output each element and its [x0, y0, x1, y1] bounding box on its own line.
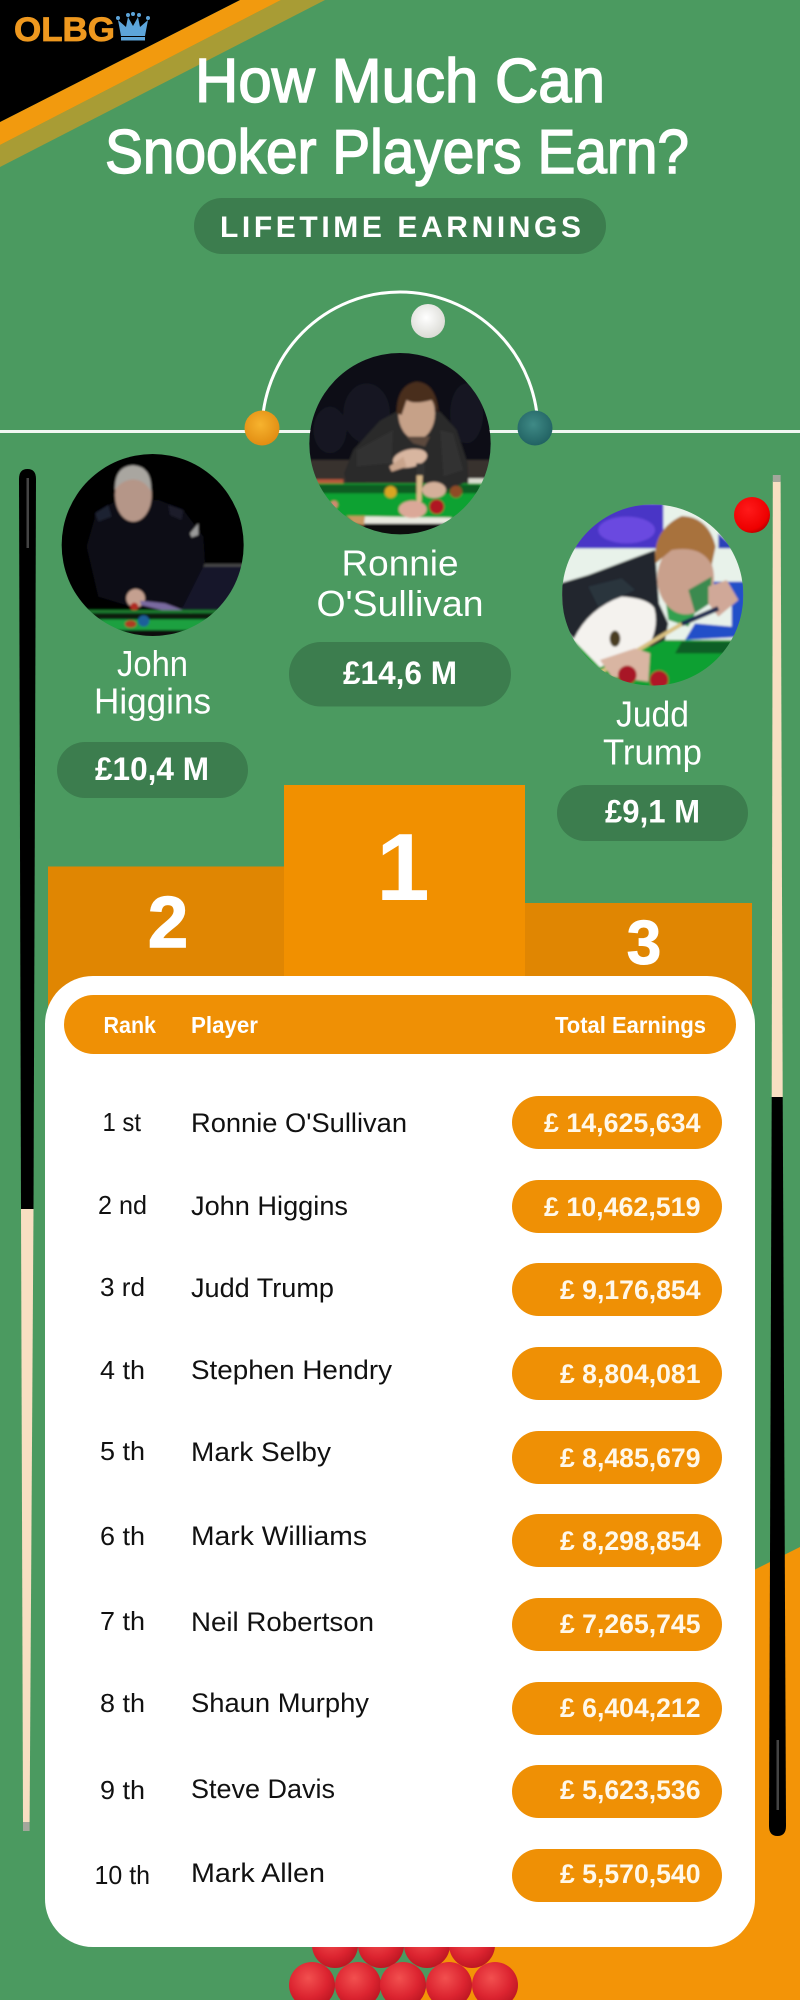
row 10: £ 5,570,540: [560, 1859, 700, 1889]
row 10: Mark Allen: [191, 1858, 325, 1888]
table header: Player: [191, 1012, 258, 1038]
row 4: 4 th: [100, 1355, 145, 1385]
ball: red beside Judd Trump: [734, 497, 770, 533]
subtitle pill: lifetime earnings: [194, 198, 606, 254]
podium: second place: 2: [148, 883, 188, 963]
card: Judd Trump name and earnings: [557, 694, 748, 841]
row 1: Ronnie O'Sullivan: [191, 1108, 407, 1138]
row 8: [100, 1682, 722, 1735]
row 8: £ 6,404,212: [560, 1693, 700, 1723]
row 7: [100, 1598, 722, 1651]
row 3: £ 9,176,854: [560, 1275, 700, 1305]
row 7: 7 th: [100, 1606, 145, 1636]
podium: first place: 1: [376, 814, 430, 921]
title: [105, 47, 689, 187]
orange corner band: [0, 0, 281, 145]
card: Judd Trump name and earnings: £9,1 M: [605, 794, 700, 830]
olive corner band: [0, 0, 325, 167]
row 5: £ 8,485,679: [560, 1443, 700, 1473]
card: Judd Trump name and earnings: Judd: [616, 694, 689, 734]
card: Ronnie O'Sullivan name and earnings: Ronnie: [342, 542, 458, 584]
ball: yellow: [244, 410, 280, 446]
row 2: 2 nd: [98, 1190, 147, 1220]
row 3: 3 rd: [100, 1272, 145, 1302]
row 1: 1 st: [102, 1107, 142, 1137]
right cue: [769, 475, 786, 1836]
row 8: 8 th: [100, 1688, 145, 1718]
row 3: [100, 1263, 722, 1316]
table header: Total Earnings: [555, 1012, 706, 1038]
row 6: 6 th: [100, 1521, 145, 1551]
podium: third place: [525, 903, 752, 1043]
card: John Higgins name and earnings: [57, 643, 248, 798]
row 9: 9 th: [100, 1775, 145, 1805]
row 2: £ 10,462,519: [544, 1192, 700, 1222]
row 7: Neil Robertson: [191, 1607, 374, 1637]
row 4: Stephen Hendry: [191, 1355, 393, 1385]
row 1: £ 14,625,634: [544, 1108, 700, 1138]
row 6: Mark Williams: [191, 1521, 367, 1551]
row 4: [100, 1347, 722, 1400]
logo: OLBG: OLBG: [14, 11, 115, 49]
row 9: Steve Davis: [191, 1774, 335, 1804]
photo: Ronnie O'Sullivan: [309, 353, 491, 534]
card: John Higgins name and earnings: £10,4 M: [95, 751, 209, 787]
black corner: [0, 0, 240, 122]
podium: third place: 3: [627, 909, 661, 978]
row 10: [94, 1849, 722, 1902]
card: Ronnie O'Sullivan name and earnings: O'Sullivan: [316, 583, 484, 624]
row 4: £ 8,804,081: [560, 1359, 700, 1389]
table baulk line and D arc: [0, 292, 800, 432]
row 9: £ 5,623,536: [560, 1775, 700, 1805]
row 9: [100, 1765, 722, 1818]
table header: [64, 995, 736, 1054]
table header: Rank: [104, 1012, 157, 1038]
row 5: 5 th: [100, 1436, 145, 1466]
row 6: [100, 1514, 722, 1567]
row 8: Shaun Murphy: [191, 1688, 370, 1718]
card: Ronnie O'Sullivan name and earnings: £14,6 M: [343, 655, 457, 691]
row 10: 10 th: [94, 1860, 150, 1890]
card: John Higgins name and earnings: Higgins: [94, 680, 211, 722]
title: How Much Can: [195, 47, 605, 116]
photo: Judd Trump: [562, 504, 744, 686]
panel: earnings table: [45, 976, 755, 1947]
orange corner bottom right: [420, 1547, 800, 2000]
row 5: Mark Selby: [191, 1437, 332, 1467]
ball: teal: [518, 410, 552, 446]
row 2: [98, 1180, 722, 1233]
subtitle pill: lifetime earnings: LIFETIME EARNINGS: [220, 211, 581, 244]
row 6: £ 8,298,854: [560, 1526, 700, 1556]
podium: second place: [48, 866, 284, 1046]
podium: first place: [284, 785, 525, 1035]
row 2: John Higgins: [191, 1191, 348, 1221]
row 7: £ 7,265,745: [560, 1609, 700, 1639]
red balls rack: [289, 1922, 518, 2000]
row 5: [100, 1431, 722, 1484]
ball: white: [411, 304, 445, 338]
left cue: [19, 469, 36, 1831]
title: Snooker Players Earn?: [105, 118, 689, 187]
row 1: [102, 1096, 722, 1149]
card: Judd Trump name and earnings: Trump: [603, 732, 702, 772]
photo: John Higgins: [62, 454, 244, 636]
row 3: Judd Trump: [191, 1273, 334, 1303]
card: John Higgins name and earnings: John: [117, 643, 188, 684]
card: Ronnie O'Sullivan name and earnings: [289, 542, 511, 706]
